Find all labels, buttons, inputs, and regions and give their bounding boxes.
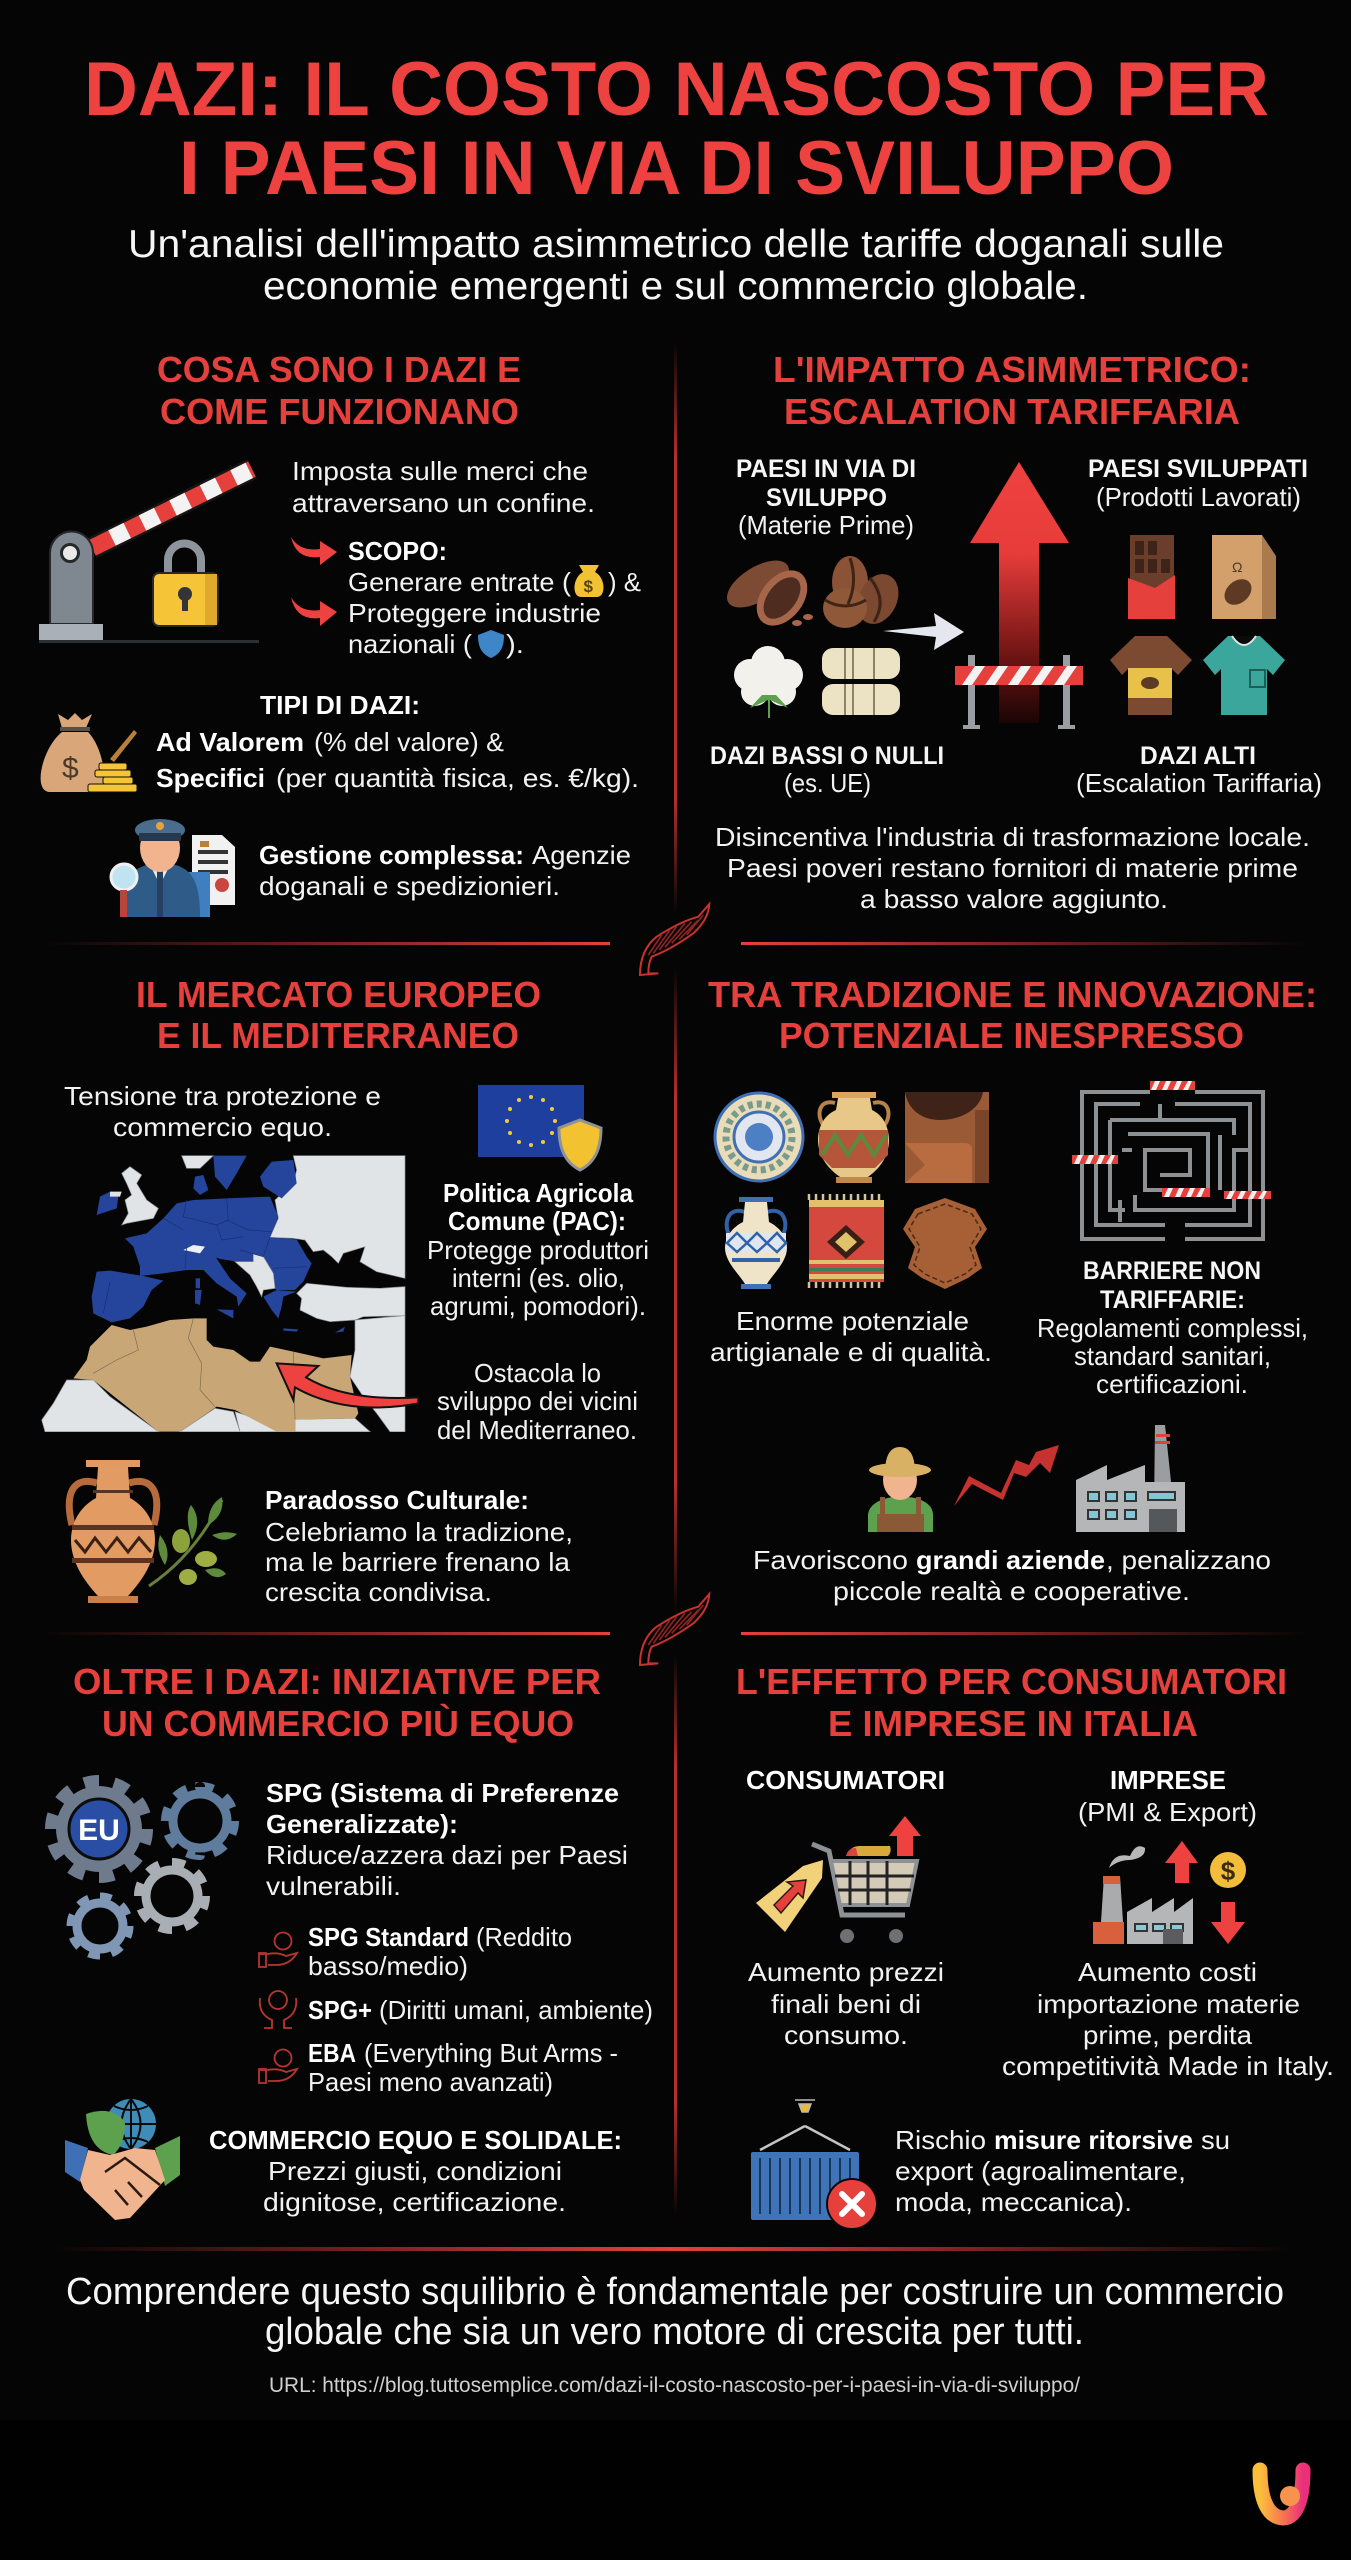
text: scopo: SCOPO: [348, 536, 447, 566]
icon: road barrier [955, 655, 1083, 729]
heading [736, 1661, 1287, 1744]
text: conclusion: Disincentiva l'industria di trasformazione locale. [715, 822, 1310, 852]
icon: hand with coin one [259, 1932, 297, 1967]
text: eba: (Everything But Arms - [364, 2038, 618, 2068]
heading: ESCALATION TARIFFARIA [784, 391, 1240, 432]
icon: blue white vase [725, 1197, 787, 1289]
icon: leather goods [905, 1092, 989, 1183]
label: dazi bassi [710, 742, 944, 798]
panel: mercato europeo [42, 974, 649, 1607]
subtitle: Un'analisi dell'impatto asimmetrico delle tariffe doganali sulle [128, 223, 1224, 266]
heading: OLTRE I DAZI: INIZIATIVE PER [73, 1661, 601, 1702]
icon: eu gears: EU [78, 1814, 120, 1847]
title: DAZI: IL COSTO NASCOSTO PER [84, 47, 1269, 132]
heading [708, 974, 1317, 1056]
text: grandi aziende: , penalizzano [1106, 1545, 1271, 1575]
icon: money bag and coins [41, 713, 137, 792]
text: commercio equo e solidale: dignitose, certificazione. [263, 2187, 566, 2217]
text: pac: Comune (PAC): [448, 1206, 626, 1236]
icon: shopping cart with price tag [756, 1816, 921, 1943]
text: tipi di dazi: TIPI DI DAZI: [260, 690, 420, 720]
label: dazi alti: DAZI ALTI [1140, 742, 1256, 770]
icon: coffee beans [823, 556, 906, 631]
icon: white arrow [883, 613, 964, 650]
icon: tall red arrow [970, 462, 1069, 723]
footer text: Comprendere questo squilibrio è fondamentale per costruire un commercio [66, 2271, 1284, 2313]
text: gestione complessa: Agenzie [532, 840, 631, 870]
heading: POTENZIALE INESPRESSO [779, 1015, 1244, 1056]
text: commercio equo e solidale [209, 2125, 622, 2217]
text: grandi aziende: Favoriscono [753, 1545, 908, 1575]
label: dazi bassi: (es. UE) [784, 768, 871, 798]
text: spg standard: SPG Standard [308, 1922, 469, 1952]
text: barriere non tariffarie: standard sanitari, [1074, 1341, 1271, 1371]
text: paradosso culturale: crescita condivisa. [265, 1577, 492, 1607]
text: spg [266, 1778, 628, 1901]
text: eba: EBA [308, 2038, 356, 2068]
text: aumento costi: competitività Made in Italy. [1002, 2051, 1334, 2081]
label: dazi alti [1076, 742, 1322, 798]
text: spg standard: (Reddito [476, 1922, 572, 1952]
heading: E IMPRESE IN ITALIA [828, 1703, 1198, 1744]
source url: URL: https://blog.tuttosemplice.com/dazi-il-costo-nascosto-per-i-paesi-in-via-di-sviluppo/ [269, 2373, 1080, 2397]
icon: inline shield [478, 630, 504, 658]
label: paesi in via di sviluppo: SVILUPPO [766, 484, 887, 512]
text: scopo: Proteggere industrie [348, 598, 601, 628]
icon: inline money bag [574, 565, 604, 597]
text: aumento prezzi: consumo. [784, 2020, 908, 2050]
text: enorme potenziale: artigianale e di qualità. [710, 1337, 992, 1367]
icon: coffee bag [1212, 535, 1276, 619]
label: imprese: (PMI & Export) [1078, 1797, 1257, 1827]
text: aumento costi: Aumento costi [1078, 1957, 1257, 1987]
title: I PAESI IN VIA DI SVILUPPO [179, 126, 1174, 211]
heading: TRA TRADIZIONE E INNOVAZIONE: [708, 974, 1317, 1015]
text: commercio equo e solidale: Prezzi giusti, condizioni [268, 2156, 562, 2186]
text: tipi di dazi: (% del valore) & [314, 727, 504, 757]
text: barriere non tariffarie: Regolamenti complessi, [1037, 1313, 1308, 1343]
text: tipi di dazi: (per quantità fisica, es. €/kg). [276, 763, 639, 793]
logo [1260, 2470, 1303, 2518]
text: pac: Politica Agricola [443, 1178, 633, 1208]
text: barriere non tariffarie: certificazioni. [1096, 1369, 1248, 1399]
text: grandi aziende: grandi aziende [916, 1545, 1105, 1575]
text: tensione: commercio equo. [113, 1112, 332, 1142]
panel: cosa sono i dazi [39, 349, 641, 917]
icon: customs barrier and padlock [39, 469, 259, 643]
label: paesi in via di sviluppo: PAESI IN VIA DI [736, 455, 916, 483]
text: spg standard: basso/medio) [308, 1951, 468, 1981]
text: spg plus: SPG+ [308, 1995, 372, 2025]
text: misure ritorsive: su [1201, 2125, 1230, 2155]
icon: leaf divider top [640, 904, 709, 975]
text: scopo [348, 536, 641, 659]
icon: coffee bag: Ω [1232, 559, 1242, 575]
text: aumento prezzi: finali beni di [771, 1989, 921, 2019]
label: paesi in via di sviluppo [736, 455, 916, 540]
icon: customs officer [111, 819, 235, 917]
text: tipi di dazi: Specifici [156, 763, 265, 793]
icon: cotton [734, 646, 803, 718]
text: spg standard [308, 1922, 572, 1981]
icon: inline money bag: $ [584, 577, 594, 596]
icon: curved arrow two [291, 597, 337, 626]
icon: money bag and coins: $ [62, 752, 79, 785]
text: ostacola: del Mediterraneo. [437, 1415, 637, 1445]
text: spg: vulnerabili. [266, 1871, 401, 1901]
text: barriere non tariffarie [1037, 1257, 1308, 1399]
footer text [66, 2271, 1284, 2353]
panel: impatto asimmetrico [710, 349, 1322, 914]
text: conclusion: Paesi poveri restano fornitori di materie prime [727, 853, 1298, 883]
icon: painted vase [818, 1092, 889, 1183]
icon: eu flag with shield [478, 1085, 601, 1170]
text: enorme potenziale [710, 1306, 992, 1367]
title [84, 47, 1269, 211]
text: ostacola [437, 1358, 638, 1445]
text: aumento costi [1002, 1957, 1334, 2081]
icon: zigzag growth arrow [954, 1445, 1059, 1506]
heading [157, 349, 521, 432]
icon: curved arrow one [291, 537, 337, 565]
label: consumatori: CONSUMATORI [746, 1765, 945, 1795]
text: pac: agrumi, pomodori). [430, 1291, 646, 1321]
text: definition: attraversano un confine. [292, 488, 595, 518]
icon: hands with coin two [260, 1991, 296, 2028]
text: tensione: Tensione tra protezione e [64, 1081, 381, 1111]
heading [773, 349, 1251, 432]
text: scopo: ) & [608, 567, 641, 597]
text: commercio equo e solidale: COMMERCIO EQUO E SOLIDALE: [209, 2125, 622, 2155]
text: scopo: ). [506, 629, 524, 659]
label: dazi alti: (Escalation Tariffaria) [1076, 768, 1322, 798]
heading [136, 974, 541, 1056]
icon: ceramic plate [715, 1093, 803, 1181]
text: tensione [64, 1081, 381, 1142]
heading: IL MERCATO EUROPEO [136, 974, 541, 1015]
subtitle [128, 223, 1224, 308]
text: conclusion [715, 822, 1310, 914]
heading: UN COMMERCIO PIÙ EQUO [102, 1702, 574, 1744]
icon: factory with cost arrows [1093, 1841, 1246, 1944]
icon: chocolate bar [1128, 535, 1175, 619]
heading: COSA SONO I DAZI E [157, 349, 521, 390]
label: paesi sviluppati: PAESI SVILUPPATI [1088, 455, 1308, 483]
text: misure ritorsive: Rischio [895, 2125, 986, 2155]
text: paradosso culturale [265, 1485, 573, 1607]
text: pac: interni (es. olio, [452, 1263, 625, 1293]
text: definition [292, 456, 595, 518]
panel: oltre i dazi [51, 1661, 653, 2220]
icon: blocked container [751, 2100, 877, 2229]
label: paesi sviluppati [1088, 455, 1308, 512]
icon: farmer [868, 1447, 933, 1532]
text: aumento prezzi: Aumento prezzi [748, 1957, 944, 1987]
label: imprese: IMPRESE [1110, 1765, 1226, 1795]
text: paradosso culturale: ma le barriere frenano la [265, 1547, 571, 1577]
icon: maze with barriers [1072, 1081, 1271, 1239]
panel: tradizione e innovazione [708, 974, 1317, 1606]
heading: L'IMPATTO ASIMMETRICO: [773, 349, 1251, 390]
icon: teal t-shirt [1203, 636, 1285, 715]
icon: leather hide [903, 1198, 987, 1289]
text: scopo: Generare entrate ( [348, 567, 571, 597]
icon: amphora [69, 1460, 157, 1603]
heading [73, 1661, 601, 1744]
subtitle: economie emergenti e sul commercio globale. [263, 265, 1088, 308]
text: barriere non tariffarie: BARRIERE NON [1083, 1257, 1261, 1285]
text: tipi di dazi: Ad Valorem [156, 727, 304, 757]
text: grandi aziende [753, 1545, 1271, 1606]
heading: COME FUNZIONANO [160, 391, 519, 432]
text: aumento costi: importazione materie [1037, 1989, 1300, 2019]
panel: consumatori e imprese [736, 1661, 1334, 2229]
icon: factory with cost arrows: $ [1221, 1856, 1236, 1886]
label: paesi sviluppati: (Prodotti Lavorati) [1096, 482, 1301, 512]
text: conclusion: a basso valore aggiunto. [860, 884, 1168, 914]
map: europe and mediterranean [42, 1156, 418, 1432]
icon: cotton bales [822, 648, 900, 715]
text: aumento prezzi [748, 1957, 944, 2050]
icon: factory [1076, 1425, 1185, 1532]
text: pac: Protegge produttori [427, 1235, 649, 1265]
footer text: globale che sia un vero motore di crescita per tutti. [265, 2311, 1084, 2353]
icon: eu gears [51, 1781, 234, 1955]
icon: brown t-shirt [1110, 636, 1192, 715]
icon: woven rug [809, 1194, 884, 1288]
text: definition: Imposta sulle merci che [292, 456, 588, 486]
text: gestione complessa: Gestione complessa: [259, 840, 524, 870]
text: spg: Generalizzate): [266, 1809, 458, 1839]
text: ostacola: sviluppo dei vicini [437, 1386, 638, 1416]
text: grandi aziende: piccole realtà e cooperative. [833, 1576, 1190, 1606]
text: gestione complessa [259, 840, 631, 901]
label: dazi bassi: DAZI BASSI O NULLI [710, 742, 944, 770]
text: gestione complessa: doganali e spedizionieri. [259, 871, 560, 901]
text: scopo: nazionali ( [348, 629, 472, 659]
text: paradosso culturale: Celebriamo la tradizione, [265, 1517, 573, 1547]
text: tipi di dazi [156, 690, 639, 793]
text: misure ritorsive: misure ritorsive [994, 2125, 1193, 2155]
text: misure ritorsive [895, 2125, 1230, 2217]
icon: hand with coin three [259, 2050, 297, 2083]
icon: cocoa pod [719, 551, 818, 635]
text: eba: Paesi meno avanzati) [308, 2067, 553, 2097]
label: imprese [1078, 1765, 1257, 1827]
text: paradosso culturale: Paradosso Culturale: [265, 1485, 529, 1515]
icon: olive branch [149, 1497, 237, 1586]
text: misure ritorsive: moda, meccanica). [895, 2187, 1132, 2217]
text: misure ritorsive: export (agroalimentare, [895, 2156, 1186, 2186]
text: enorme potenziale: Enorme potenziale [736, 1306, 969, 1336]
text: spg plus: (Diritti umani, ambiente) [379, 1995, 653, 2025]
text: ostacola: Ostacola lo [474, 1358, 601, 1388]
heading: L'EFFETTO PER CONSUMATORI [736, 1661, 1287, 1702]
text: pac [427, 1178, 649, 1321]
label: paesi in via di sviluppo: (Materie Prime) [738, 510, 914, 540]
text: aumento costi: prime, perdita [1083, 2020, 1253, 2050]
text: spg: SPG (Sistema di Preferenze [266, 1778, 619, 1808]
icon: handshake and globe [65, 2099, 180, 2220]
text: barriere non tariffarie: TARIFFARIE: [1100, 1286, 1245, 1314]
heading: E IL MEDITERRANEO [157, 1015, 519, 1056]
text: spg: Riduce/azzera dazi per Paesi [266, 1840, 628, 1870]
text: eba [308, 2038, 618, 2097]
icon: leaf divider bottom [640, 1594, 709, 1665]
